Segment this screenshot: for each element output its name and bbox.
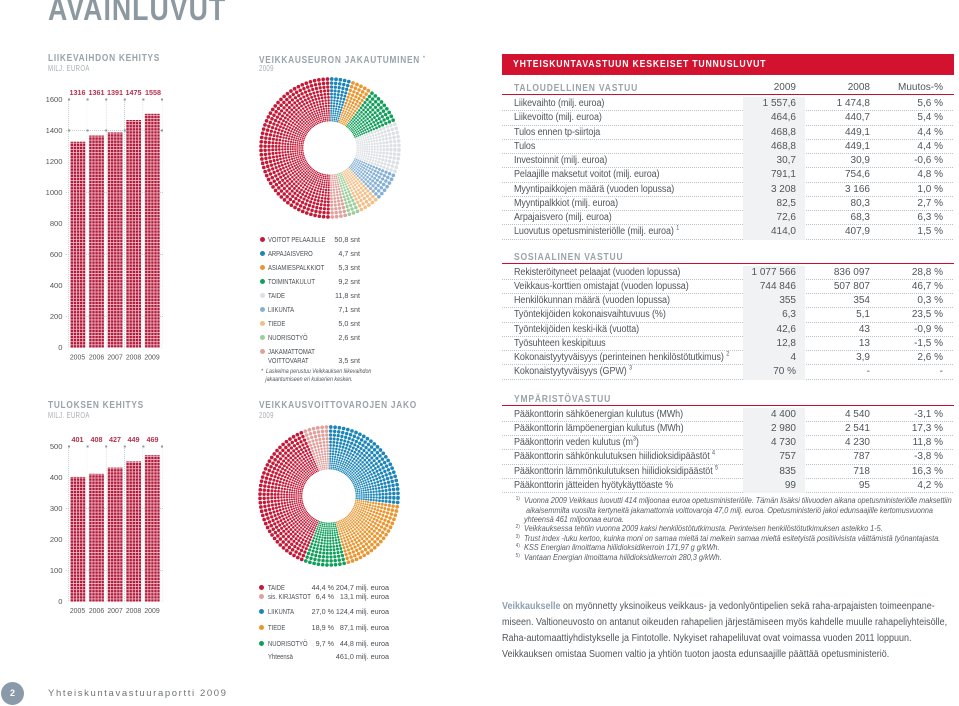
legend item: sis. kirjastot: sis. KIRJASTOT: [268, 592, 311, 600]
donut chart: veikkauseuron jakautuminen: [259, 77, 401, 219]
table: taloudellinen vastuu: 468,8: [771, 127, 796, 138]
table: ympäristövastuu: 16,3 %: [912, 466, 943, 477]
value labels: 469: [146, 435, 158, 444]
year labels: 2009: [144, 608, 160, 615]
value labels: [72, 435, 158, 444]
footer text: Yhteiskuntavastuuraportti 2009: [48, 688, 228, 699]
table: ympäristövastuu: Pääkonttorin jätteiden hyötykäyttöaste %: [514, 480, 673, 491]
table: taloudellinen vastuu: 30,7: [777, 155, 796, 166]
table: ympäristövastuu: 99: [785, 480, 796, 491]
table: taloudellinen vastuu: Tulos: [514, 141, 535, 152]
axis labels: 500: [50, 442, 62, 451]
table header: SOSIAALINEN VASTUU: [514, 250, 623, 262]
legend item: nuorisotyö: [260, 333, 360, 342]
legend item: tiede: 5,0 snt: [338, 319, 360, 328]
legend item: taide: TAIDE: [268, 291, 285, 300]
year labels: 2009: [144, 354, 160, 362]
year labels: 2007: [107, 608, 123, 615]
legend item: voitot pelaajille: 50,8 snt: [334, 235, 360, 244]
year labels: 2007: [107, 354, 123, 362]
legend item: taide: 204,7 milj. euroa: [336, 583, 389, 592]
table header: Muutos-%: [898, 82, 943, 93]
legend item: nuorisotyö: 44,8 milj. euroa: [340, 638, 389, 648]
footnotes: 2): [516, 524, 520, 530]
table: sosiaalinen vastuu: 3,9: [856, 352, 870, 363]
legend item: jakamattomat voittovarat: [260, 347, 360, 365]
table: taloudellinen vastuu: 5,4 %: [917, 112, 943, 123]
table: taloudellinen vastuu: 3 208: [771, 184, 796, 195]
table: ympäristövastuu: Pääkonttorin veden kulutus (m3): [514, 437, 639, 448]
table: taloudellinen vastuu: 1 474,8: [837, 98, 870, 109]
year labels: 2006: [89, 608, 104, 615]
table: ympäristövastuu: 4 730: [771, 437, 796, 448]
table: sosiaalinen vastuu: 43: [859, 324, 870, 335]
axis labels: [46, 95, 62, 352]
legend footnote: [261, 368, 372, 382]
table: sosiaalinen vastuu: Rekisteröityneet pelaajat (vuoden lopussa): [514, 266, 680, 278]
table: taloudellinen vastuu: 4,4 %: [917, 141, 943, 152]
legend total: 461,0 milj. euroa: [336, 652, 389, 661]
table: sosiaalinen vastuu: Veikkaus-korttien omistajat (vuoden lopussa): [514, 281, 689, 292]
legend item: asiamiespalkkiot: 5,3 snt: [338, 263, 360, 272]
table: ympäristövastuu: -3,1 %: [914, 408, 943, 420]
table: sosiaalinen vastuu: 28,8 %: [912, 266, 943, 278]
legend item: taide: 11,8 snt: [335, 291, 360, 300]
legend footnote: * Laskelma perustuu Veikkauksen liikevaihdon: [261, 368, 371, 375]
legend item: liikunta: LIIKUNTA: [268, 305, 294, 314]
legend item: liikunta: 124,4 milj. euroa: [336, 607, 389, 616]
table: sosiaalinen vastuu: [502, 250, 954, 380]
legend item: sis. kirjastot: [259, 592, 389, 600]
table: ympäristövastuu: 4 540: [845, 408, 870, 420]
table: ympäristövastuu: 757: [779, 451, 796, 462]
bar chart: tuloksen kehitys: [50, 435, 163, 615]
value labels: 408: [90, 435, 102, 444]
donut chart: veikkausvoittovarojen jako: [258, 425, 400, 567]
table: ympäristövastuu: Pääkonttorin lämpöenergian kulutus (MWh): [514, 423, 683, 434]
table: taloudellinen vastuu: 80,3: [851, 198, 870, 209]
table: sosiaalinen vastuu: 1 077 566: [752, 266, 796, 278]
table: taloudellinen vastuu: 1,0 %: [917, 184, 943, 195]
table: ympäristövastuu: Pääkonttorin sähkönkulutuksen hiilidioksidipäästöt 4: [514, 451, 715, 462]
bar chart: liikevaihdon kehitys: [46, 88, 163, 362]
axis labels: 0: [58, 597, 62, 606]
table: sosiaalinen vastuu: 42,6: [777, 324, 796, 335]
table header: [502, 248, 954, 264]
bars: [70, 114, 160, 348]
legend item: nuorisotyö: NUORISOTYÖ: [268, 638, 308, 648]
legend item: nuorisotyö: 2,6 snt: [338, 333, 360, 342]
axis labels: 400: [50, 473, 62, 482]
legend item: toimintakulut: [260, 277, 360, 286]
legend item: nuorisotyö: [259, 638, 389, 648]
table: taloudellinen vastuu: Luovutus opetusministeriölle (milj. euroa) 1: [514, 226, 679, 237]
table: taloudellinen vastuu: Myyntipalkkiot (milj. euroa): [514, 198, 618, 209]
table: ympäristövastuu: 11,8 %: [913, 437, 943, 448]
table: ympäristövastuu: 2 980: [771, 423, 796, 434]
table: taloudellinen vastuu: Tulos ennen tp-siirtoja: [514, 127, 600, 138]
table: taloudellinen vastuu: 82,5: [777, 198, 796, 209]
value labels: 1316: [70, 88, 86, 97]
legend item: voitot pelaajille: [260, 235, 360, 244]
legend item: liikunta: LIIKUNTA: [268, 607, 294, 616]
axis labels: 1600: [46, 95, 62, 104]
table: taloudellinen vastuu: [502, 82, 954, 240]
value labels: 427: [109, 435, 121, 444]
table: ympäristövastuu: 17,3 %: [912, 423, 943, 434]
table: sosiaalinen vastuu: 23,5 %: [912, 309, 943, 320]
legend item: liikunta: 7,1 snt: [338, 305, 360, 314]
banner: yhteiskuntavastuun keskeiset tunnusluvut: [502, 54, 954, 75]
year labels: 2006: [89, 354, 104, 362]
table: sosiaalinen vastuu: 354: [853, 295, 870, 306]
legend item: taide: TAIDE: [268, 583, 285, 592]
table: sosiaalinen vastuu: -1,5 %: [914, 338, 943, 349]
value labels: 1558: [145, 88, 161, 97]
table: sosiaalinen vastuu: 744 846: [760, 281, 796, 292]
table: taloudellinen vastuu: 30,9: [851, 155, 870, 166]
table: taloudellinen vastuu: 4,4 %: [917, 127, 943, 138]
legend item: toimintakulut: 9,2 snt: [338, 277, 360, 286]
subheading: milj. euroa: MILJ. EUROA: [48, 64, 90, 72]
heading: tuloksen kehitys: TULOKSEN KEHITYS: [48, 400, 144, 411]
axis labels: 100: [50, 566, 62, 575]
table header: [502, 80, 954, 95]
legend footnote: jakaantumiseen eri kuluerien kesken.: [265, 376, 353, 382]
footnote 3: Trust index -luku kertoo, kuinka moni on samaa mieltä tai melkein samaa mieltä esitetyistä positiivisista väittämistä työnantajasta.: [524, 534, 940, 542]
table: taloudellinen vastuu: 468,8: [771, 141, 796, 152]
footnotes: 1): [516, 496, 520, 502]
bars: [70, 455, 160, 602]
axis labels: 1200: [46, 157, 62, 166]
table: sosiaalinen vastuu: 0,3 %: [917, 295, 943, 306]
footnotes: [516, 496, 952, 562]
text block: veikkaus description: [502, 601, 947, 660]
table: ympäristövastuu: Pääkonttorin lämmönkulutuksen hiilidioksidipäästöt 5: [514, 465, 718, 477]
table: taloudellinen vastuu: 5,6 %: [917, 98, 943, 109]
table: taloudellinen vastuu: Liikevoitto (milj. euroa): [514, 112, 602, 123]
legend item: tiede: [259, 622, 389, 632]
legend item: taide: [260, 291, 360, 300]
text block: veikkaus description: miseen. Valtioneuvosto on antanut oikeuden rahapelien järjestämiseen myös kahdelle muulle rahapeliyhteisölle,: [502, 617, 947, 628]
legend item: arpajaisvero: [260, 249, 360, 258]
table: ympäristövastuu: 787: [853, 451, 870, 462]
axis labels: 1400: [46, 126, 62, 135]
table: taloudellinen vastuu: 4,8 %: [917, 169, 943, 180]
table: taloudellinen vastuu: 440,7: [845, 112, 870, 123]
axis labels: [50, 442, 62, 606]
table: taloudellinen vastuu: Investoinnit (milj. euroa): [514, 155, 607, 166]
legend item: tiede: [260, 319, 360, 328]
table: taloudellinen vastuu: Pelaajille maksetut voitot (milj. euroa): [514, 169, 659, 180]
table: taloudellinen vastuu: -0,6 %: [914, 155, 943, 166]
year labels: 2005: [70, 354, 85, 362]
legend item: taide: [259, 583, 389, 592]
footnote 1 continued: aikaisemmilta vuosilta kertyneitä jakamattomia voittovaroja 47,0 milj. euroa. Opetusministeriö jakoi edunsaajille kertomusvuonna: [526, 506, 933, 514]
value labels: 449: [128, 435, 140, 444]
table: ympäristövastuu: 2 541: [845, 423, 870, 434]
page number badge: 2: [10, 688, 15, 698]
table: ympäristövastuu: -3,8 %: [914, 451, 943, 462]
table: sosiaalinen vastuu: -: [867, 366, 870, 377]
table: taloudellinen vastuu: 3 166: [845, 184, 870, 195]
table: taloudellinen vastuu: 407,9: [845, 226, 870, 237]
legend item: toimintakulut: TOIMINTAKULUT: [268, 277, 315, 286]
table: sosiaalinen vastuu: 355: [779, 295, 796, 306]
table: ympäristövastuu: 95: [859, 480, 870, 491]
table header: 2009: [774, 82, 796, 93]
year labels: 2008: [126, 608, 141, 615]
legend item: liikunta: 27,0 %: [312, 607, 334, 616]
legend item: jakamattomat voittovarat: 3,5 snt: [338, 356, 360, 365]
axis labels: 200: [50, 312, 62, 321]
legend item: nuorisotyö: NUORISOTYÖ: [268, 333, 308, 342]
table: sosiaalinen vastuu: Kokonaistyytyväisyys (GPW) 3: [514, 366, 632, 377]
table: taloudellinen vastuu: 1,5 %: [917, 226, 943, 237]
table header: YMPÄRISTÖVASTUU: [514, 392, 611, 404]
value labels: 1361: [88, 88, 104, 97]
legend item: jakamattomat voittovarat: VOITTOVARAT: [268, 356, 309, 365]
legend item: nuorisotyö: 9,7 %: [316, 638, 334, 648]
table: taloudellinen vastuu: 791,1: [771, 169, 796, 180]
page number badge: [1, 682, 24, 705]
legend item: sis. kirjastot: 6,4 %: [316, 592, 334, 600]
table: taloudellinen vastuu: 754,6: [845, 169, 870, 180]
footnotes: 4): [516, 543, 520, 549]
table: sosiaalinen vastuu: Työntekijöiden keski-ikä (vuotta): [514, 324, 639, 335]
table: taloudellinen vastuu: Liikevaihto (milj. euroa): [514, 98, 604, 109]
heading: veikkauseuron jakautuminen: VEIKKAUSEURON JAKAUTUMINEN *: [259, 55, 426, 66]
legend item: tiede: 87,1 milj. euroa: [340, 622, 389, 632]
table: sosiaalinen vastuu: 836 097: [834, 266, 870, 278]
legend item: tiede: 18,9 %: [312, 622, 334, 632]
legend item: asiamiespalkkiot: [260, 263, 360, 272]
heading: veikkausvoittovarojen jako: VEIKKAUSVOITTOVAROJEN JAKO: [259, 400, 417, 411]
table: ympäristövastuu: [502, 392, 954, 493]
footnotes: 3): [516, 534, 520, 540]
table: taloudellinen vastuu: 1 557,6: [763, 98, 796, 109]
legend item: jakamattomat voittovarat: JAKAMATTOMAT: [268, 347, 315, 356]
legend item: taide: 44,4 %: [312, 583, 334, 592]
legend item: liikunta: [259, 607, 389, 616]
table: ympäristövastuu: 718: [853, 466, 870, 477]
year labels: 2008: [126, 354, 141, 362]
table: ympäristövastuu: 4,2 %: [917, 480, 943, 491]
table: ympäristövastuu: Pääkonttorin sähköenergian kulutus (MWh): [514, 408, 683, 420]
legend total: [268, 652, 389, 661]
table: taloudellinen vastuu: 449,1: [845, 141, 870, 152]
year labels: [70, 608, 160, 615]
table: sosiaalinen vastuu: 6,3: [782, 309, 796, 320]
subheading: 2009: 2009: [259, 410, 274, 420]
axis labels: 400: [50, 281, 62, 290]
table: taloudellinen vastuu: 414,0: [771, 226, 796, 237]
axis labels: 200: [50, 535, 62, 544]
value labels: 401: [72, 435, 84, 444]
table: taloudellinen vastuu: 72,6: [777, 212, 796, 223]
table: taloudellinen vastuu: 464,6: [771, 112, 796, 123]
table: ympäristövastuu: 835: [779, 466, 796, 477]
footnote 4: KSS Energian ilmoittama hiilidioksidikerroin 171,97 g g/kWh.: [524, 543, 719, 552]
table: taloudellinen vastuu: 6,3 %: [917, 212, 943, 223]
table: sosiaalinen vastuu: -0,9 %: [914, 324, 943, 335]
table: sosiaalinen vastuu: Henkilökunnan määrä (vuoden lopussa): [514, 295, 670, 306]
table header: 2008: [848, 82, 870, 93]
axis labels: 300: [50, 504, 62, 513]
table: sosiaalinen vastuu: Kokonaistyytyväisyys (perinteinen henkilöstötutkimus) 2: [514, 352, 729, 363]
table: taloudellinen vastuu: 68,3: [851, 212, 870, 223]
table: sosiaalinen vastuu: 507 807: [834, 281, 870, 292]
legend item: voitot pelaajille: VOITOT PELAAJILLE: [268, 235, 325, 244]
value labels: [70, 88, 161, 97]
footnote 1: Vuonna 2009 Veikkaus luovutti 414 miljoonaa euroa opetusministeriölle. Tämän lisäksi tilivuoden aikana opetusministeriölle maksettiin: [524, 496, 952, 505]
subheading: 2009: 2009: [259, 64, 274, 72]
axis labels: 0: [58, 343, 62, 352]
table: sosiaalinen vastuu: Työntekijöiden kokonaisvaihtuvuus (%): [514, 309, 666, 320]
table: sosiaalinen vastuu: -: [940, 366, 943, 377]
legend item: tiede: TIEDE: [268, 319, 285, 328]
year labels: 2005: [70, 608, 85, 615]
banner: yhteiskuntavastuun keskeiset tunnusluvut: YHTEISKUNTAVASTUUN KESKEISET TUNNUSLUVUT: [513, 58, 766, 70]
axis labels: 1000: [46, 188, 62, 197]
text block: veikkaus description: Veikkaukselle on myönnetty yksinoikeus veikkaus- ja vedonlyöntipelien sekä raha-arpajaisten toimeenpane-: [502, 601, 935, 612]
value labels: 1391: [107, 88, 123, 97]
legend item: sis. kirjastot: 13,1 milj. euroa: [340, 592, 389, 600]
heading: liikevaihdon kehitys: LIIKEVAIHDON KEHITYS: [48, 53, 160, 64]
table: sosiaalinen vastuu: 4: [790, 352, 796, 363]
legend item: liikunta: [260, 305, 360, 314]
table header: TALOUDELLINEN VASTUU: [514, 82, 638, 94]
table: taloudellinen vastuu: 2,7 %: [917, 198, 943, 209]
table: taloudellinen vastuu: Myyntipaikkojen määrä (vuoden lopussa): [514, 184, 674, 195]
value labels: 1475: [126, 88, 142, 97]
axis labels: 800: [50, 219, 62, 228]
table: ympäristövastuu: 4 400: [771, 408, 796, 420]
legend item: arpajaisvero: 4,7 snt: [338, 249, 360, 258]
table header: [502, 390, 954, 406]
year labels: [70, 354, 160, 362]
table: sosiaalinen vastuu: 12,8: [777, 338, 796, 349]
legend total: Yhteensä: [268, 652, 293, 661]
subheading: milj. euroa: MILJ. EUROA: [48, 410, 90, 420]
table: sosiaalinen vastuu: 5,1: [856, 309, 870, 320]
legend item: tiede: TIEDE: [268, 622, 285, 632]
table: sosiaalinen vastuu: Työsuhteen keskipituus: [514, 338, 606, 349]
table: sosiaalinen vastuu: 2,6 %: [917, 352, 943, 363]
text block: veikkaus description: Raha-automaattiyhdistykselle ja Fintotolle. Nykyiset rahapeliluvat ovat voimassa vuoden 2011 loppuun.: [502, 633, 912, 644]
table: ympäristövastuu: 4 230: [845, 437, 870, 448]
axis labels: 600: [50, 250, 62, 259]
table: sosiaalinen vastuu: 13: [859, 338, 870, 349]
footnote 2: Veikkauksessa tehtiin vuonna 2009 kaksi henkilöstötutkimusta. Perinteisen henkilöstötutkimuksen asteikko 1-5.: [524, 524, 883, 533]
table: sosiaalinen vastuu: 70 %: [773, 366, 796, 377]
table: sosiaalinen vastuu: 46,7 %: [912, 281, 943, 292]
footnote 1 end: yhteensä 461 miljoonaa euroa.: [524, 515, 624, 524]
footnote 5: Vantaan Energian ilmoittama hiilidioksidikerroin 280,3 g/kWh.: [524, 552, 722, 562]
legend: veikkausvoittovarat: [259, 583, 389, 661]
legend item: arpajaisvero: ARPAJAISVERO: [268, 249, 313, 258]
table: taloudellinen vastuu: Arpajaisvero (milj. euroa): [514, 212, 612, 223]
legend item: asiamiespalkkiot: ASIAMIESPALKKIOT: [268, 263, 324, 272]
footnotes: 5): [516, 552, 520, 558]
legend: veikkauseuro: [260, 235, 372, 382]
text block: veikkaus description: Veikkauksen omistaa Suomen valtio ja yhtiön tuoton jaosta edunsaajille päättää opetusministeriö.: [502, 649, 889, 660]
table: taloudellinen vastuu: 449,1: [845, 127, 870, 138]
